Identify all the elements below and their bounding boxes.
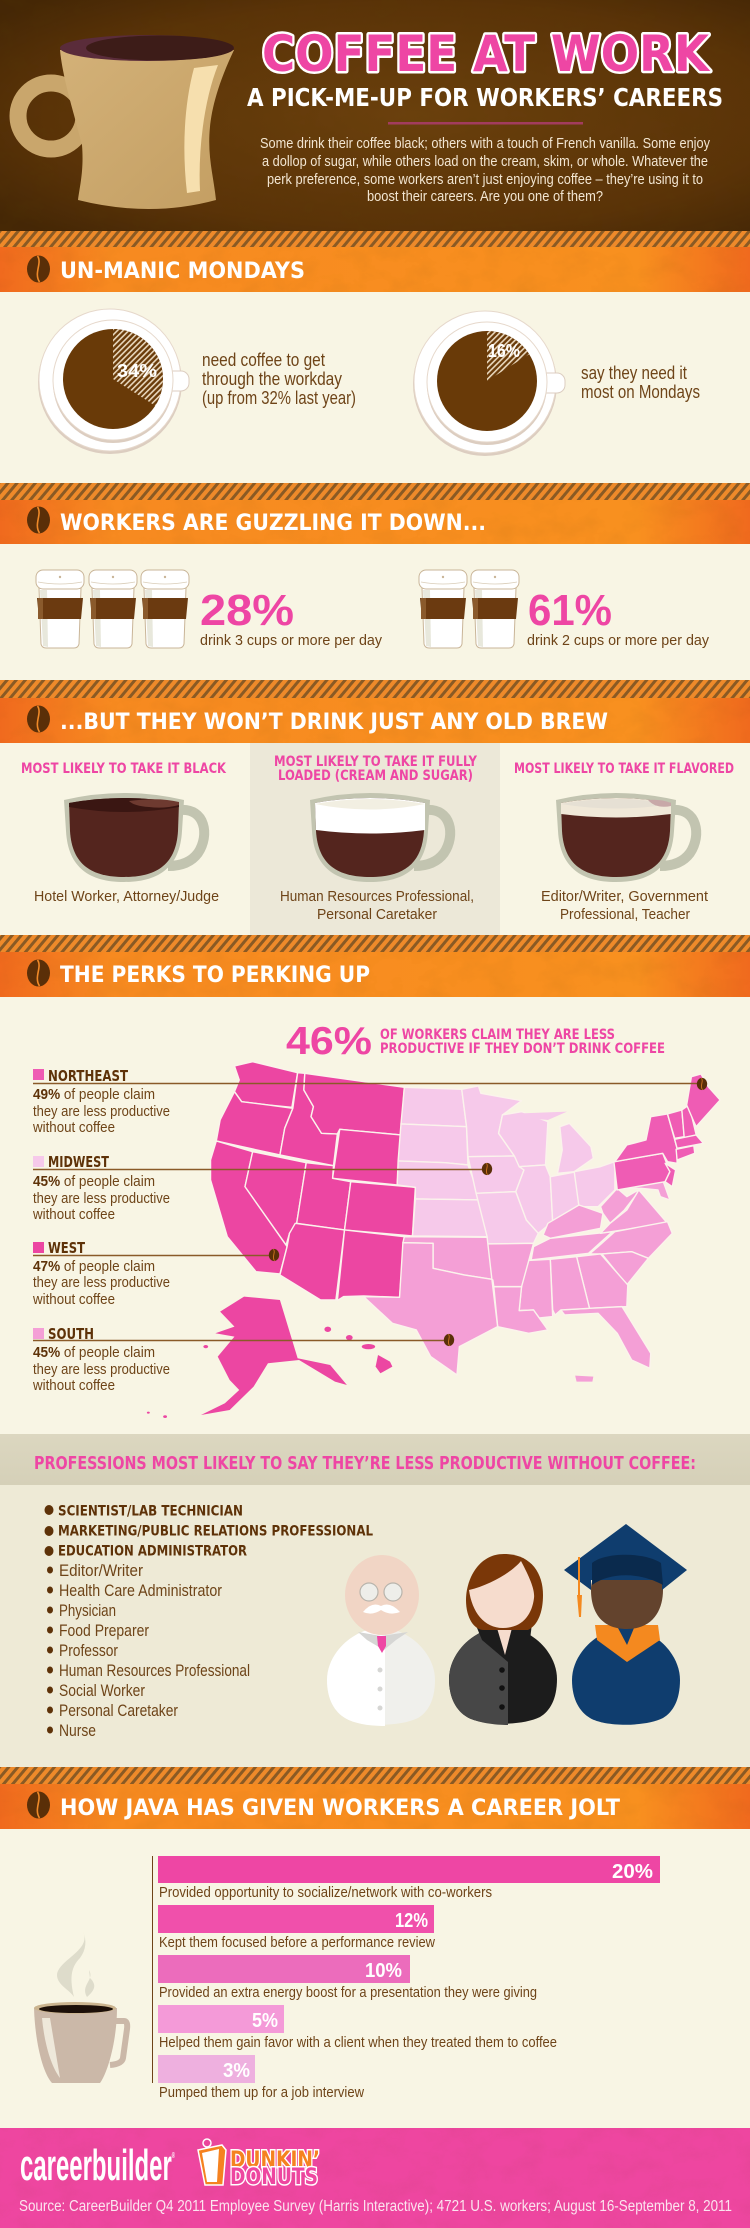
panel: coffee cup pie 34%	[38, 309, 356, 454]
bar: 10%	[158, 1955, 537, 2001]
bar: 10%: Provided an extra energy boost for a presentation they were giving	[159, 1984, 537, 2001]
caption: Personal Caretaker	[317, 906, 437, 923]
caption	[581, 363, 700, 402]
panel: 3 cups 28%	[36, 570, 382, 649]
bar: 10%: 10%	[365, 1960, 402, 1982]
icon: businesswoman	[449, 1554, 557, 1725]
list of professions: Health Care Administrator	[59, 1582, 222, 1600]
legend: Northeast: without coffee	[32, 1120, 115, 1136]
caption: most on Mondays	[581, 382, 700, 402]
caption: Professional, Teacher	[560, 906, 690, 923]
region: Midwest	[397, 1086, 615, 1244]
bar: 5%	[158, 2005, 557, 2051]
legend: West: without coffee	[32, 1292, 115, 1308]
bar: 20%: Provided opportunity to socialize/network with co-workers	[159, 1884, 492, 1901]
callout: 46%: 46%	[286, 1020, 372, 1063]
list of professions: Food Preparer	[59, 1622, 149, 1640]
icon: three travel cups	[36, 570, 189, 648]
legend: South: 45% of people claim	[33, 1345, 155, 1361]
map: United States by region	[147, 1062, 720, 1418]
legend: West: they are less productive	[33, 1275, 170, 1291]
icon: flavored coffee mug	[556, 793, 696, 882]
panel: flavored	[514, 761, 734, 923]
legend: West: 47% of people claim	[33, 1259, 155, 1275]
section heading: Un-Manic Mondays: UN-MANIC MONDAYS	[60, 259, 305, 284]
list of professions: Human Resources Professional	[59, 1662, 250, 1680]
list of professions: Personal Caretaker	[59, 1702, 178, 1720]
icon: graduate	[564, 1524, 687, 1725]
list of professions: SCIENTIST/LAB TECHNICIAN	[58, 1504, 243, 1520]
value 34%: 34%	[117, 361, 157, 381]
bar: 12%: 12%	[395, 1910, 428, 1932]
caption	[202, 350, 356, 408]
legend: West: WEST	[48, 1239, 86, 1257]
bar: 3%: Pumped them up for a job interview	[159, 2084, 364, 2101]
section heading: any old brew: ...BUT THEY WON’T DRINK JUST ANY OLD BREW	[60, 710, 608, 735]
value 28%: 28%	[200, 586, 294, 635]
list of professions	[44, 1504, 373, 1740]
logo: Dunkin' Donuts	[198, 2139, 320, 2190]
heading: MOST LIKELY TO TAKE IT BLACK	[21, 761, 227, 777]
legend: Northeast: 49% of people claim	[33, 1087, 155, 1103]
panel: professions	[0, 1434, 750, 1767]
header panel	[0, 0, 750, 231]
legend: Midwest: without coffee	[32, 1207, 115, 1223]
callout: 46%: PRODUCTIVE IF THEY DON’T DRINK COFFEE	[380, 1041, 665, 1057]
callout: 46%: OF WORKERS CLAIM THEY ARE LESS	[380, 1027, 615, 1043]
panel: take it black	[21, 761, 227, 905]
logo: careerbuilder: ®	[172, 2151, 175, 2160]
list of professions: Social Worker	[59, 1682, 145, 1700]
caption: Hotel Worker, Attorney/Judge	[34, 888, 219, 905]
caption	[280, 888, 474, 923]
section heading: career jolt: HOW JAVA HAS GIVEN WORKERS A CAREER JOLT	[60, 1796, 620, 1821]
heading: MOST LIKELY TO TAKE IT FULLY	[274, 754, 477, 770]
list of professions: Editor/Writer	[59, 1562, 143, 1580]
caption: through the workday	[202, 369, 342, 389]
section heading: Workers are guzzling	[0, 483, 750, 544]
icon: cream coffee mug	[310, 793, 450, 882]
icon: scientist	[327, 1555, 435, 1726]
legend: West	[32, 1239, 279, 1308]
section heading: Un-Manic Mondays	[0, 231, 750, 292]
bar chart: career jolts	[152, 1856, 660, 2101]
caption: drink 2 cups or more per day	[527, 632, 709, 649]
bar: 3%	[158, 2055, 364, 2101]
section heading: career jolt	[0, 1767, 750, 1829]
bar: 20%: 20%	[612, 1861, 653, 1883]
intro paragraph: boost their careers. Are you one of them?	[367, 188, 603, 205]
section heading: perks: THE PERKS TO PERKING UP	[60, 963, 370, 988]
icon: black coffee mug	[64, 793, 204, 882]
callout: 46%	[286, 1020, 665, 1063]
legend: Midwest: 45% of people claim	[33, 1174, 155, 1190]
section heading: perks	[0, 935, 750, 997]
icon: steaming coffee mug	[34, 1932, 127, 2083]
caption	[541, 888, 709, 923]
legend: Northeast: NORTHEAST	[48, 1067, 129, 1085]
legend: Northeast: they are less productive	[33, 1104, 170, 1120]
list of professions: Physician	[59, 1602, 116, 1620]
region: South	[364, 1180, 672, 1382]
section heading: Workers are guzzling: WORKERS ARE GUZZLING IT DOWN...	[60, 511, 486, 536]
legend: Midwest: MIDWEST	[48, 1153, 110, 1171]
panel: fully loaded	[250, 743, 500, 935]
logo: Dunkin' Donuts: DUNKIN’	[230, 2148, 320, 2173]
value 16%: 16%	[488, 341, 520, 361]
list of professions: MARKETING/PUBLIC RELATIONS PROFESSIONAL	[58, 1524, 373, 1540]
bar: 5%: Helped them gain favor with a client when they treated them to coffee	[159, 2034, 557, 2051]
panel: coffee cup pie 16%	[413, 311, 700, 456]
legend: South: without coffee	[32, 1378, 115, 1394]
bar: 3%: 3%	[223, 2060, 250, 2082]
legend: Northeast	[32, 1067, 707, 1136]
list of professions: Nurse	[59, 1722, 96, 1740]
caption: Editor/Writer, Government	[541, 888, 709, 905]
title: COFFEE AT WORK	[262, 25, 711, 83]
legend: Midwest: they are less productive	[33, 1191, 170, 1207]
logo: careerbuilder: careerbuilder	[20, 2141, 299, 2190]
section heading: any old brew	[0, 680, 750, 743]
region: West	[147, 1062, 415, 1418]
bar: 12%: Kept them focused before a performance review	[159, 1934, 435, 1951]
legend: Midwest	[32, 1153, 492, 1223]
value 61%: 61%	[528, 586, 612, 635]
caption: need coffee to get	[202, 350, 325, 370]
heading	[274, 754, 477, 784]
intro paragraph	[260, 135, 710, 205]
panel: 2 cups 61%	[419, 570, 709, 649]
caption: (up from 32% last year)	[202, 388, 356, 408]
bar: 20%	[158, 1856, 660, 1901]
caption: Human Resources Professional,	[280, 888, 474, 905]
icon: large coffee mug	[18, 35, 234, 209]
legend: South	[32, 1325, 454, 1394]
caption: drink 3 cups or more per day	[200, 632, 382, 649]
footer panel	[0, 2128, 750, 2228]
bar: 5%: 5%	[252, 2010, 278, 2032]
caption: say they need it	[581, 363, 687, 383]
bar: 12%	[158, 1905, 435, 1951]
list of professions: Professor	[59, 1642, 118, 1660]
legend: South: they are less productive	[33, 1362, 170, 1378]
icon: two travel cups	[419, 570, 519, 648]
logo: Dunkin' Donuts: DONUTS	[230, 2165, 318, 2190]
heading: LOADED (CREAM AND SUGAR)	[278, 768, 473, 784]
list of professions: EDUCATION ADMINISTRATOR	[58, 1544, 247, 1560]
region: Northeast	[614, 1074, 720, 1190]
legend: South: SOUTH	[48, 1325, 94, 1343]
